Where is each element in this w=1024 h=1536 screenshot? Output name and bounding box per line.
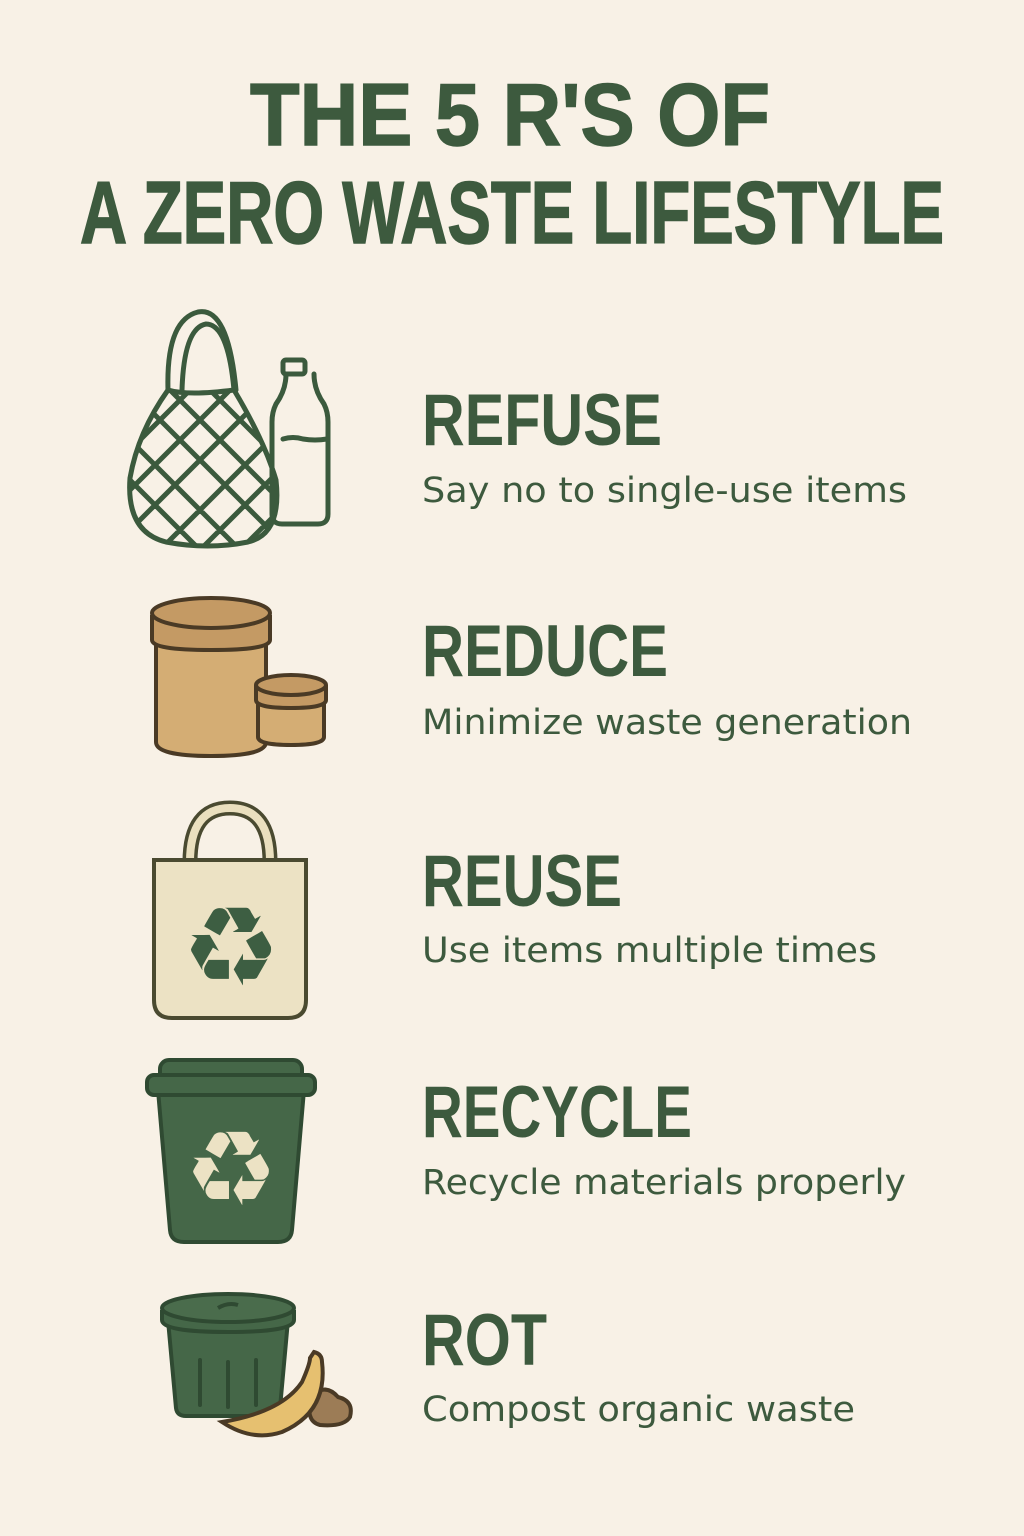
icon: tote bag with recycle symbol [154, 808, 306, 1018]
heading: reduce: Minimize waste generation [422, 703, 912, 743]
heading: recycle: RECYCLE [422, 1072, 692, 1153]
heading: rot: Compost organic waste [422, 1390, 855, 1430]
heading: rot: ROT [422, 1300, 547, 1381]
icon: mesh bag and bottle [127, 309, 330, 548]
heading: reduce [422, 611, 912, 743]
icon: recycling bin [147, 1060, 315, 1242]
icon: jars [152, 598, 326, 756]
heading: refuse [422, 380, 907, 511]
heading: reuse: REUSE [422, 841, 622, 922]
heading: reduce: REDUCE [422, 611, 668, 692]
heading: refuse: Say no to single-use items [422, 471, 907, 511]
heading: recycle: Recycle materials properly [422, 1163, 906, 1203]
icon: compost bin with banana [162, 1294, 351, 1435]
heading: reuse: Use items multiple times [422, 931, 877, 971]
heading: reuse [422, 841, 877, 971]
heading: rot [422, 1300, 855, 1430]
heading: recycle [422, 1072, 906, 1203]
title [80, 65, 944, 262]
icon: recycling bin: ♻ [184, 1108, 278, 1230]
icon: tote bag with recycle symbol: ♻ [182, 883, 280, 1011]
heading: refuse: REFUSE [422, 380, 662, 461]
title: THE 5 R'S OF [250, 65, 770, 164]
